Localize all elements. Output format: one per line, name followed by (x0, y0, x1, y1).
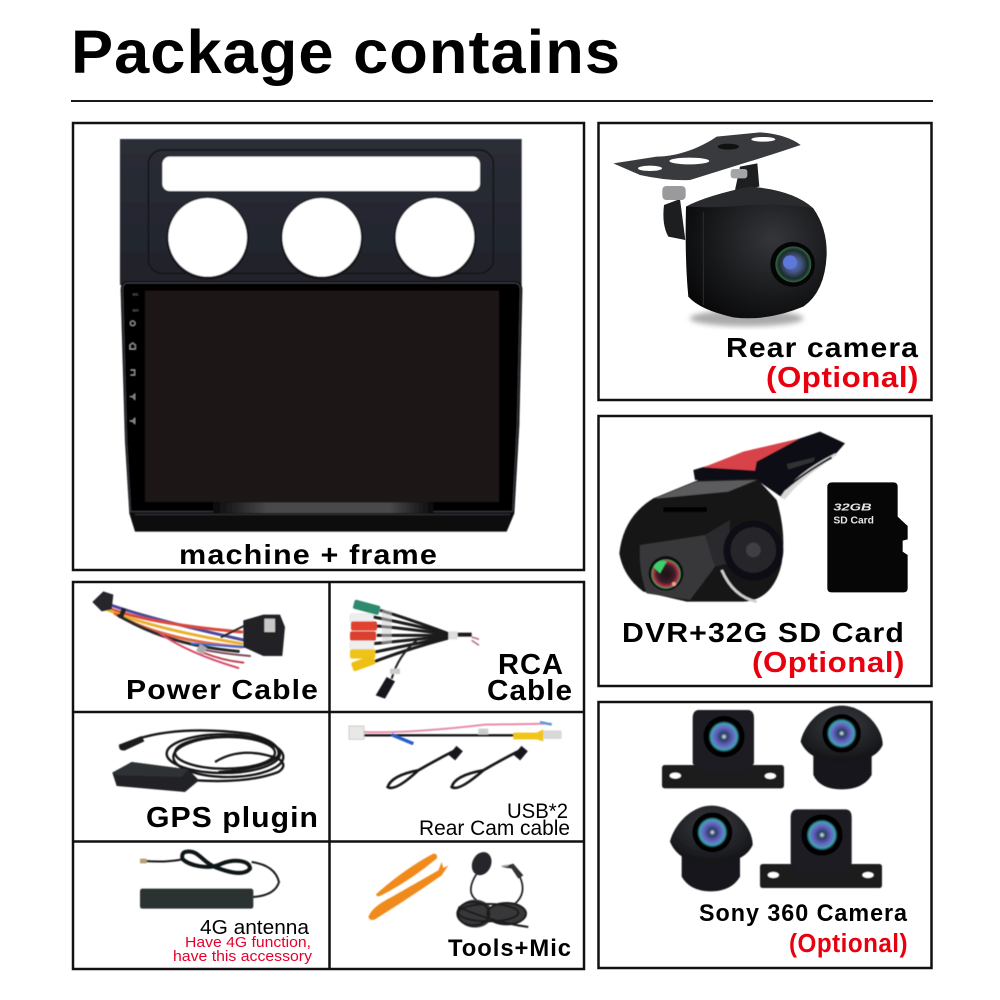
cell: RCA cable (350, 599, 573, 707)
icon: four cameras (662, 706, 883, 891)
label: Rear Cam cable: Rear Cam cable (419, 817, 570, 840)
camera: dome type bottom (670, 806, 753, 891)
note: accessory: have this accessory (173, 948, 313, 965)
icon: microphone (457, 849, 528, 928)
icon: 32GB SD card (827, 482, 908, 592)
label: machine + frame: machine + frame (179, 539, 438, 570)
label: rear camera: Rear camera (726, 332, 919, 363)
label: USB*2: USB*2 (507, 800, 568, 823)
icon: orange trim tools (368, 854, 448, 920)
panel: DVR + SD card (598, 416, 932, 686)
icon: power cable (92, 591, 285, 668)
camera: bracket type top (662, 710, 784, 788)
icon: 32GB SD card: SD Card (833, 515, 874, 526)
icon: head unit with dash frame: RST (133, 309, 139, 313)
icon: 4G antenna (140, 851, 279, 909)
label: tools + mic: Tools+Mic (448, 935, 572, 962)
cell: 4G antenna (140, 851, 313, 965)
cell: GPS plugin (112, 730, 319, 834)
label: GPS plugin: GPS plugin (146, 802, 319, 834)
label: optional: (Optional) (752, 647, 905, 679)
panel: Sony 360 camera (598, 702, 932, 968)
icon: rear cam cable and USB cables (349, 722, 562, 788)
label: DVR + 32G SD card: DVR+32G SD Card (622, 617, 905, 648)
note: 4G function: Have 4G function, (185, 934, 311, 951)
cell: tools and mic (368, 849, 572, 962)
label: optional: (Optional) (789, 930, 908, 958)
icon: head unit with dash frame (120, 139, 522, 532)
label: Sony 360 camera: Sony 360 Camera (699, 900, 908, 927)
icon: rear camera (613, 132, 827, 326)
label: power cable: Power Cable (126, 674, 319, 705)
panel: accessories grid (73, 582, 584, 969)
cell: power cable (92, 591, 319, 705)
icon: DVR (619, 432, 845, 602)
icon: GPS antenna (112, 730, 283, 792)
label: 4G antenna: 4G antenna (200, 917, 310, 939)
label: RCA: RCA (498, 649, 564, 681)
icon: head unit with dash frame: MIC (133, 293, 139, 297)
cell: USB and rear cam cable (349, 722, 570, 840)
panel: machine + frame (73, 123, 584, 570)
icon: RCA cable (350, 599, 479, 699)
title: Package contains (71, 18, 621, 86)
panel: rear camera (598, 123, 932, 400)
camera: dome type top (801, 706, 883, 789)
icon: 32GB SD card: 32GB (833, 503, 872, 514)
label: optional: (Optional) (766, 362, 919, 394)
camera: bracket type bottom (760, 809, 882, 888)
label: Cable: Cable (487, 675, 573, 707)
